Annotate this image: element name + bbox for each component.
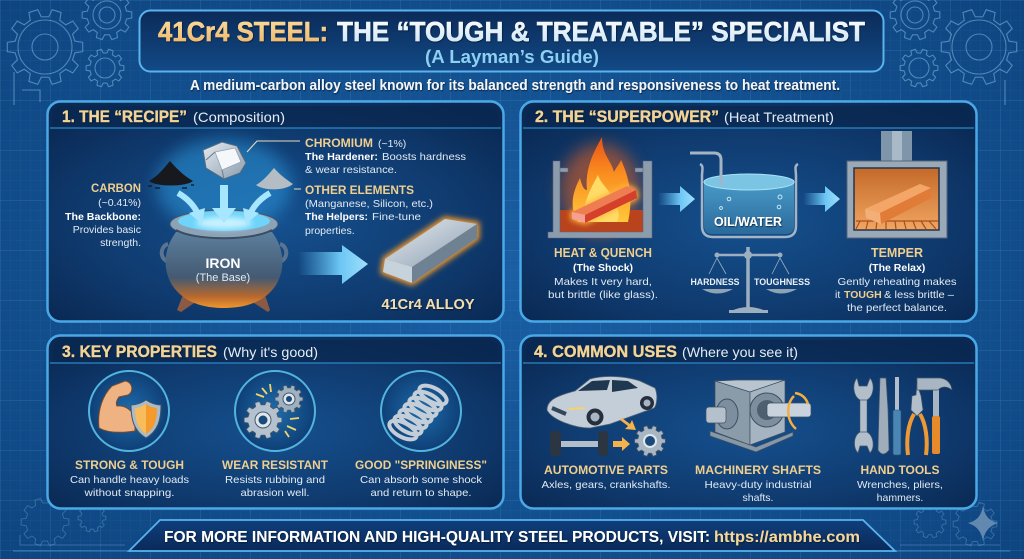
label: toughness: TOUGHNESS [754, 277, 810, 288]
text: hand tools [857, 463, 943, 504]
arrows into cauldron [178, 185, 270, 224]
text: hand tools: HAND TOOLS [860, 463, 940, 477]
text: hand tools: Wrenches, pliers, [857, 479, 943, 491]
heading: 1. THE “RECIPE” [62, 107, 187, 126]
label: other elements: (Manganese, Silicon, etc.) [305, 198, 433, 210]
text: good springiness: GOOD "SPRINGINESS" [355, 458, 487, 472]
text: machinery shafts: MACHINERY SHAFTS [695, 463, 821, 477]
text: temper: it [835, 289, 840, 301]
icon: carbon pile [148, 161, 194, 188]
text: good springiness [355, 458, 487, 499]
heading: (Why it's good) [223, 344, 318, 360]
text: heat and quench: but brittle (like glass). [548, 289, 658, 301]
label: other elements [305, 183, 433, 237]
text: strong and tough: Can handle heavy loads [70, 474, 189, 486]
text: temper: & less brittle – [884, 289, 954, 301]
heading: 4. COMMON USES [534, 342, 677, 361]
text: strong and tough [70, 458, 189, 499]
text: wear resistant [222, 458, 329, 499]
text: wear resistant: Resists rubbing and [225, 474, 325, 486]
label: carbon: (~0.41%) [98, 197, 141, 209]
leader lines [247, 141, 301, 189]
panel 2: the superpower [520, 102, 976, 322]
text: good springiness: and return to shape. [370, 487, 472, 499]
footer text: FOR MORE INFORMATION AND HIGH-QUALITY STEEL PRODUCTS, VISIT: [164, 529, 710, 546]
decorative gears: left [7, 0, 132, 105]
footer url: https://ambhe.com [714, 529, 860, 546]
heading: (Where you see it) [682, 344, 798, 360]
label: chromium: & wear resistance. [305, 164, 397, 176]
heading: (Composition) [193, 109, 285, 125]
decorative gears: right [890, 0, 1017, 105]
icon: cauldron [162, 210, 286, 312]
text: heat and quench: HEAT & QUENCH [554, 246, 652, 260]
icon: machinery shaft [706, 380, 811, 452]
text: temper: TEMPER [871, 246, 923, 260]
text: machinery shafts: shafts. [743, 492, 773, 504]
label: chromium: CHROMIUM [305, 136, 373, 150]
label: chromium: Boosts hardness [382, 151, 466, 163]
text: strong and tough: without snapping. [83, 487, 174, 499]
icon: car and parts [547, 377, 665, 456]
label: other elements: OTHER ELEMENTS [305, 183, 414, 197]
text: heat and quench: Makes It very hard, [554, 276, 652, 288]
label: chromium: The Hardener: [305, 151, 378, 163]
text: automotive parts [542, 463, 670, 491]
decorative gears: bottom [20, 498, 1000, 546]
glow behind ingredients [156, 139, 292, 231]
label: iron: IRON [206, 255, 240, 271]
label: other elements: The Helpers: [305, 211, 368, 223]
text: machinery shafts: Heavy-duty industrial [704, 479, 812, 491]
icon: tempering oven [847, 131, 947, 238]
heading: (Heat Treatment) [724, 109, 834, 125]
text: hand tools: hammers. [877, 492, 923, 504]
text: heat and quench [548, 246, 658, 301]
tagline: A medium-carbon alloy steel known for its balanced strength and responsiveness to heat treatment. [190, 78, 840, 94]
text: temper: Gently reheating makes [838, 276, 956, 288]
footer banner [129, 520, 895, 551]
text: wear resistant: WEAR RESISTANT [222, 458, 329, 472]
heading: 3. KEY PROPERTIES [62, 342, 217, 361]
heading [535, 107, 834, 126]
label: carbon: Provides basic [73, 224, 141, 236]
arrow: to temper [803, 186, 840, 212]
text: strong and tough: STRONG & TOUGH [75, 458, 184, 472]
heading [62, 107, 285, 126]
icon: balance scale [690, 247, 810, 313]
text: temper: TOUGH [844, 289, 882, 301]
title: THE “TOUGH & TREATABLE” SPECIALIST [337, 16, 865, 47]
icon: quench tank [690, 153, 798, 237]
label: iron: (The Base) [196, 272, 250, 284]
text: good springiness: Can absorb some shock [360, 474, 483, 486]
title banner [140, 10, 884, 72]
icon: strong and tough [89, 371, 169, 451]
label: carbon: CARBON [91, 181, 141, 195]
text: temper [835, 246, 956, 314]
text: heat and quench: (The Shock) [573, 262, 633, 274]
label: other elements: Fine-tune [372, 211, 421, 223]
subtitle: (A Layman’s Guide) [425, 47, 599, 67]
heading: 2. THE “SUPERPOWER” [535, 107, 719, 126]
icon: steel bar [383, 219, 477, 283]
text: machinery shafts [695, 463, 821, 504]
heading [62, 342, 318, 361]
text: temper: the perfect balance. [847, 302, 947, 314]
arrow to alloy [298, 245, 368, 284]
label: hardness: HARDNESS [690, 277, 740, 288]
heading [534, 342, 798, 361]
label: chromium: (~1%) [378, 138, 406, 150]
label: chromium [305, 136, 466, 176]
panel 3: key properties [48, 336, 504, 508]
icon: other elements pile [256, 168, 293, 189]
label: carbon: The Backbone: [65, 211, 141, 223]
panel 1: the recipe [48, 102, 504, 322]
panel 4: common uses [520, 336, 976, 508]
text: automotive parts: AUTOMOTIVE PARTS [544, 463, 668, 477]
icon: sparkle [968, 506, 998, 541]
text: wear resistant: abrasion well. [240, 487, 310, 499]
label: alloy: 41Cr4 ALLOY [382, 297, 475, 313]
label: oil/water: OIL/WATER [714, 215, 782, 229]
icon: hand tools [854, 377, 952, 455]
icon: wear resistant [235, 371, 315, 451]
label: other elements: properties. [305, 225, 355, 237]
icon: springiness [381, 371, 461, 451]
text: temper: (The Relax) [869, 262, 925, 274]
label: carbon [65, 181, 141, 249]
label: iron [196, 255, 250, 284]
text: automotive parts: Axles, gears, crankshafts. [542, 479, 670, 491]
title: 41Cr4 STEEL: [158, 16, 328, 47]
icon: chromium chunk [203, 142, 246, 179]
arrow: to quench [658, 186, 695, 212]
icon: furnace with flame [548, 137, 652, 238]
label: carbon: strength. [100, 237, 141, 249]
